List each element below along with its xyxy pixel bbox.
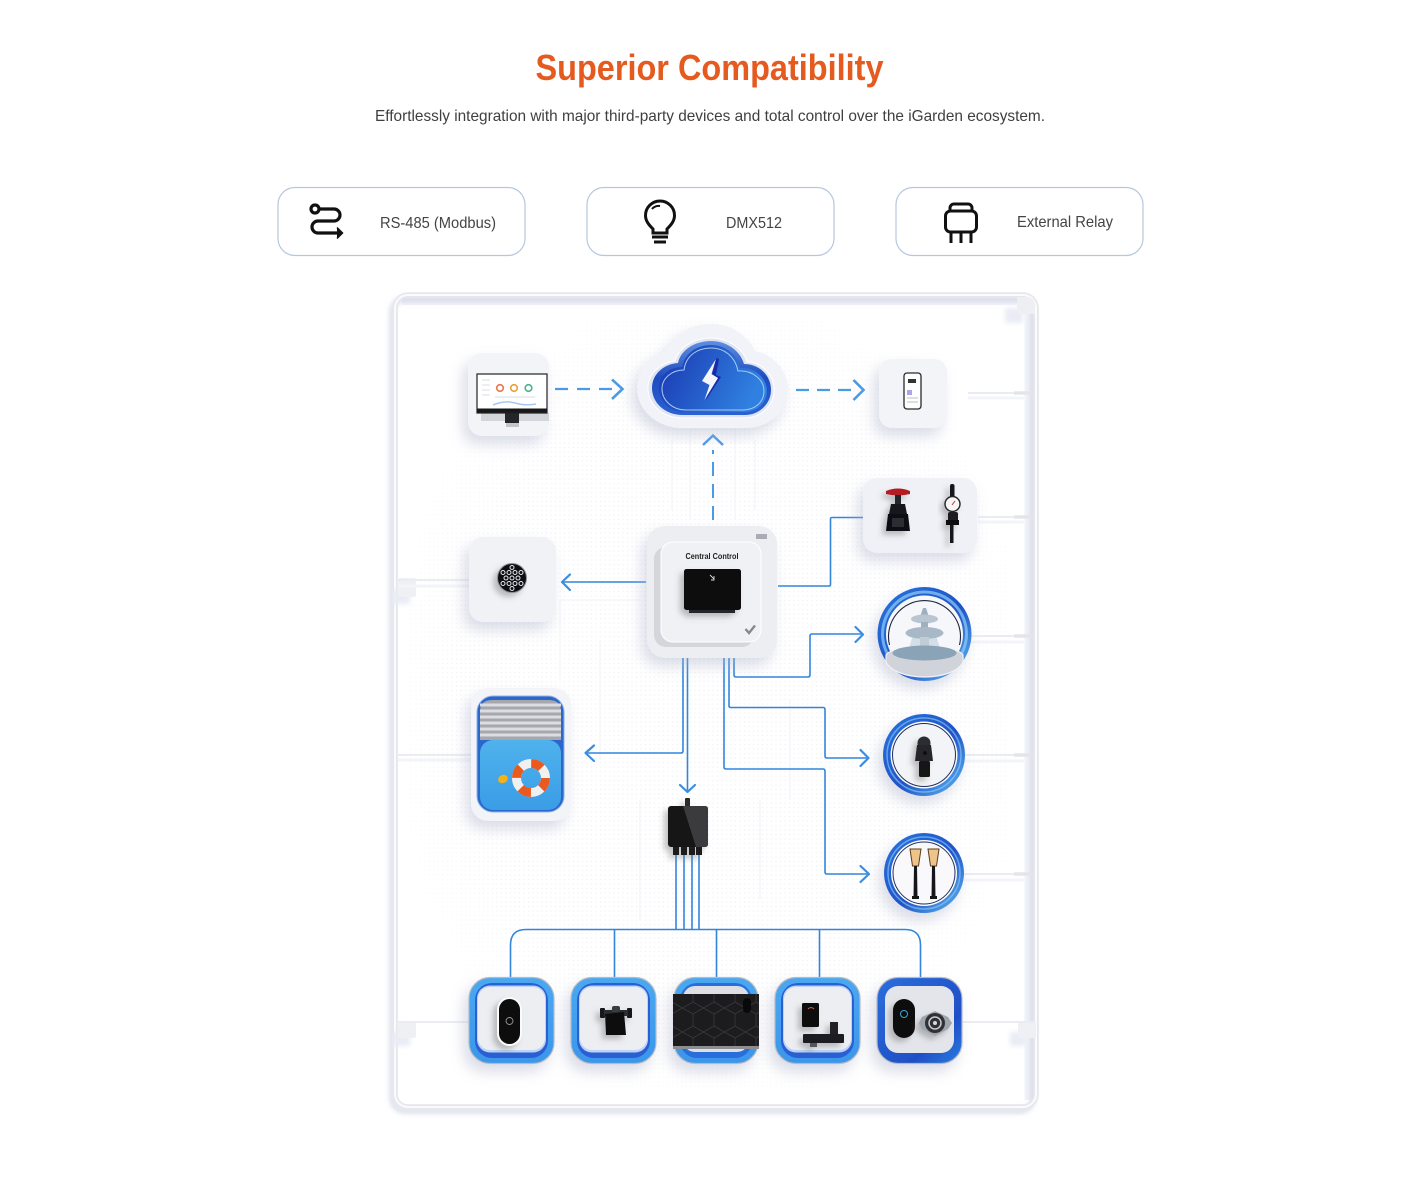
label: Central Control: Central Control [686,551,738,561]
arrowheads [562,574,869,882]
monitor stand [481,413,549,421]
label: DMX512: DMX512 [726,215,782,232]
line to gateway [686,657,688,791]
label: External Relay: External Relay [1017,214,1113,231]
icon: light bulb [646,201,674,242]
device tile: controller [469,978,554,1064]
control panel [802,1003,819,1027]
line to pump [729,657,868,758]
node: pump valve [883,714,965,796]
node: valve and pressure gauge [863,478,977,553]
pipe fitting [803,1022,844,1047]
line to connector [562,581,646,583]
lamp right [928,849,939,899]
subtitle: Effortlessly integration with major third-party devices and total control over the iGarden ecosystem. [375,108,1045,125]
dashed link: monitor to cloud [555,380,622,399]
icon: relay [946,204,976,243]
valve [886,488,910,531]
node: cloud [648,338,774,418]
heat pump body [673,994,759,1047]
actuator [915,736,933,777]
controller device [684,569,741,613]
device tile: heat pump [673,978,759,1064]
controller pill [893,999,915,1038]
protocol card: DMX512 [587,188,834,256]
icon: check mark [746,626,755,633]
pressure gauge [945,484,960,543]
device tile: controller and fan [877,978,962,1064]
bus line to bottom devices [510,930,920,977]
fountain tiers [920,608,929,617]
phone [904,373,921,409]
node: garden lamps [884,833,964,913]
device tile: pool controller and pump [775,978,860,1064]
fan [919,1011,952,1036]
node: fountain [878,587,972,681]
connection lines [510,518,920,977]
rubber duck [497,773,509,785]
node: mobile phone [879,359,947,428]
meter [600,1006,632,1035]
node: swimming pool [471,688,571,821]
icon: serial route [311,205,342,238]
icon: lightning bolt [706,358,721,400]
life ring [516,764,546,792]
device tile: flow meter [571,978,656,1064]
title: Superior Compatibility [536,47,884,88]
node: multi-pin connector [469,537,556,622]
lamp left [910,849,921,899]
gateway output lines [676,855,699,929]
dashed link: central control to cloud [703,436,723,520]
pool cover [480,700,561,740]
line to pool [586,657,683,753]
protocol card: External Relay [896,188,1143,256]
protocol card: RS-485 (Modbus) [278,188,525,256]
line to lamps [724,657,868,874]
connector [498,564,526,592]
line to fountain [734,634,862,677]
monitor screen [477,374,547,413]
dashed link: cloud to phone [796,380,864,400]
controller pill [497,997,522,1046]
gateway splitter [668,798,708,855]
panel: system diagram frame [392,295,1036,1107]
gateway pins [673,847,702,855]
label: RS-485: RS-485 (Modbus) [380,215,496,232]
line to valves [778,518,863,586]
node: web dashboard monitor [468,353,549,436]
node: central control [647,526,777,658]
